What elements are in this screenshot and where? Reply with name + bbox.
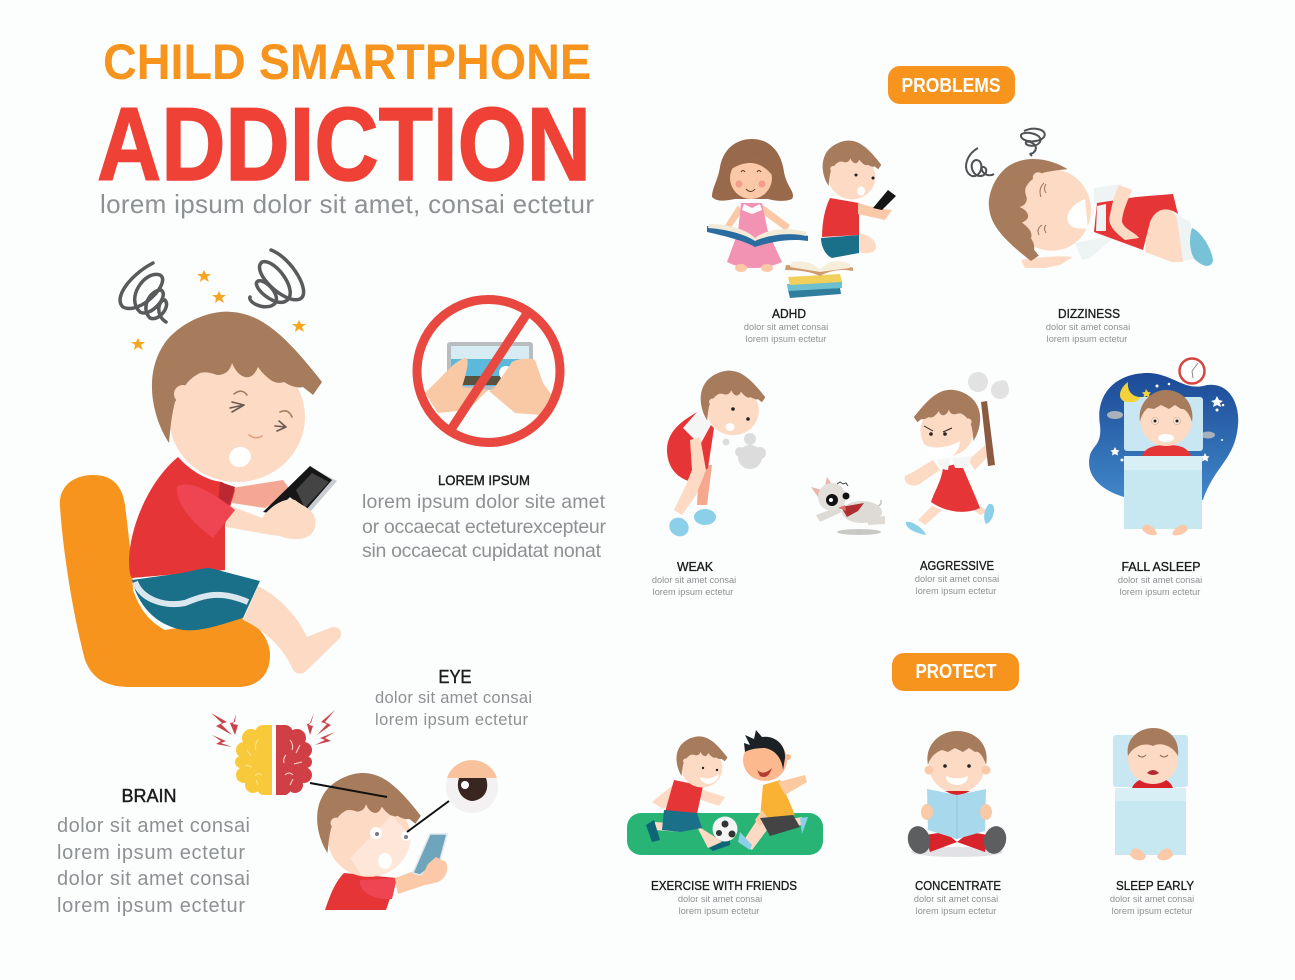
girl feet	[735, 264, 747, 272]
text block: brain	[57, 785, 250, 917]
blanket	[1115, 788, 1186, 855]
pillow	[1124, 397, 1203, 451]
grass	[627, 813, 823, 855]
label: concentrate: lorem ipsum ectetur	[916, 906, 996, 916]
label: concentrate: CONCENTRATE	[915, 878, 1001, 893]
boy looking at glowing phone	[310, 773, 449, 910]
label: fall asleep: dolor sit amet consai	[1118, 575, 1202, 585]
hand	[422, 857, 447, 885]
head	[914, 390, 980, 456]
label: weak: WEAK	[677, 559, 713, 574]
sleeve	[177, 484, 235, 538]
mouth	[226, 444, 254, 470]
phone	[413, 834, 447, 875]
head	[317, 773, 421, 877]
text block: lorem ipsum: or occaecat ecteturexcepteur	[362, 516, 606, 538]
pillow	[1113, 735, 1188, 787]
boy two hair	[744, 730, 785, 770]
label: dizziness: dolor sit amet consai	[1046, 322, 1130, 332]
leg and foot	[243, 586, 341, 674]
shirt	[1132, 777, 1173, 788]
subtitle: lorem ipsum dolor sit amet, consai ectetur	[100, 189, 594, 219]
dog scarf	[841, 503, 864, 517]
dog ears	[811, 477, 834, 500]
shoes	[906, 522, 926, 535]
label: adhd: dolor sit amet consai	[744, 322, 828, 332]
legs	[918, 506, 942, 525]
boy one shirt	[665, 780, 703, 814]
feet	[1142, 525, 1188, 535]
shorts	[132, 568, 260, 630]
label: dizziness: lorem ipsum ectetur	[1047, 334, 1127, 344]
breath puffs	[722, 433, 766, 469]
arm and front leg	[674, 437, 706, 515]
stick	[981, 401, 995, 466]
closed eyes	[1138, 755, 1168, 757]
icon: brain with lightning	[211, 710, 335, 795]
head	[1140, 394, 1192, 446]
badge: problems: PROBLEMS	[902, 75, 1000, 97]
sock	[1170, 210, 1198, 262]
red hemisphere	[276, 725, 312, 795]
closed eyes	[1038, 183, 1046, 235]
label: fall asleep: FALL ASLEEP	[1122, 559, 1200, 574]
label: sleep early	[1110, 878, 1194, 916]
pointer line to brain	[310, 783, 387, 797]
dog body	[842, 501, 882, 523]
label: dizziness: DIZZINESS	[1058, 306, 1120, 321]
text block: lorem ipsum	[362, 472, 606, 562]
phone in landscape	[447, 342, 533, 390]
dress	[931, 463, 980, 512]
label: sleep early: SLEEP EARLY	[1116, 878, 1194, 893]
badge: problems	[888, 66, 1015, 104]
icon: dizzy coil left	[120, 263, 167, 322]
main illustration: boy on chair with smartphone	[60, 250, 341, 687]
boy shirt	[822, 198, 859, 237]
arms	[905, 460, 940, 486]
label: adhd: lorem ipsum ectetur	[746, 334, 826, 344]
label: adhd: ADHD	[772, 306, 806, 321]
text block: lorem ipsum: lorem ipsum dolor site amet	[362, 491, 606, 513]
foot	[1190, 228, 1213, 266]
body	[667, 412, 714, 482]
boy shorts	[821, 235, 859, 258]
label: aggressive: AGGRESSIVE	[920, 558, 994, 573]
head	[929, 737, 985, 793]
shadow	[911, 847, 1003, 857]
label: weak	[652, 559, 736, 597]
shirt	[1142, 445, 1191, 456]
girl face	[730, 157, 772, 199]
hugging arm	[1109, 185, 1139, 240]
eyes	[370, 827, 382, 839]
boy two face	[743, 739, 787, 781]
label: fall asleep: lorem ipsum ectetur	[1120, 587, 1200, 597]
panel: aggressive	[811, 372, 1009, 535]
text block: eye: dolor sit amet consai	[375, 689, 532, 707]
text block: eye: lorem ipsum ectetur	[375, 711, 528, 729]
boy two shorts	[760, 815, 800, 836]
label: exercise with friends: EXERCISE WITH FRIENDS	[651, 878, 797, 893]
head	[989, 159, 1091, 261]
shirt	[1094, 194, 1178, 250]
panel: adhd	[707, 139, 896, 298]
dog shadow	[837, 529, 881, 535]
icon: eye close-up	[446, 760, 498, 813]
blanket	[1124, 456, 1202, 529]
boy two legs	[742, 817, 803, 850]
girl dress	[727, 203, 782, 268]
text block: eye	[375, 666, 532, 729]
legs	[925, 832, 988, 852]
boy knee	[859, 234, 876, 253]
collar	[945, 791, 970, 797]
dog head	[818, 483, 846, 511]
pale gap in shirt	[1096, 204, 1106, 231]
boy two shirt	[760, 780, 795, 818]
dog legs and tail	[816, 507, 885, 525]
boy two arm	[755, 775, 807, 826]
icon: stars	[131, 270, 306, 350]
mouth	[1147, 770, 1159, 775]
night blob	[1089, 373, 1238, 500]
label: aggressive	[915, 558, 999, 596]
label: exercise with friends	[651, 878, 797, 916]
phone	[264, 467, 337, 514]
head	[1128, 734, 1178, 784]
boy one shorts	[662, 810, 702, 832]
title line: child smartphone: CHILD SMARTPHONE	[103, 34, 591, 90]
hands	[425, 358, 488, 413]
badge: protect: PROTECT	[916, 661, 996, 683]
text block: eye: EYE	[438, 666, 472, 687]
panel: exercise with friends	[627, 730, 823, 855]
shirt	[325, 873, 397, 910]
boy head	[823, 141, 881, 199]
text block: lorem ipsum: sin occaecat cupidatat nonat	[362, 540, 602, 562]
night stars	[1110, 383, 1224, 462]
badge: protect	[892, 653, 1019, 691]
near arm and hand	[226, 499, 315, 539]
girl arms	[722, 205, 790, 232]
far arm	[232, 480, 292, 508]
open book	[707, 226, 808, 247]
label: sleep early: dolor sit amet consai	[1110, 894, 1194, 904]
text block: lorem ipsum: LOREM IPSUM	[438, 472, 530, 488]
brain folds	[284, 740, 302, 785]
clouds	[1107, 411, 1215, 438]
panel: sleep early	[1113, 728, 1188, 860]
panel: weak	[666, 371, 766, 540]
book	[927, 789, 986, 839]
head	[152, 312, 322, 482]
stack of books	[788, 288, 841, 298]
boy one legs	[655, 822, 722, 848]
text block: brain: dolor sit amet consai	[57, 868, 250, 890]
label: weak: dolor sit amet consai	[652, 575, 736, 585]
feet	[1130, 848, 1173, 860]
chair	[60, 475, 270, 687]
head	[701, 371, 765, 435]
upper pale sleeve	[1094, 184, 1122, 205]
text block: brain: lorem ipsum ectetur	[57, 895, 245, 917]
under hand	[1021, 256, 1073, 268]
boy one head	[676, 736, 728, 788]
boy phone	[873, 190, 896, 210]
no-phone sign icon	[417, 300, 560, 442]
text block: brain: dolor sit amet consai	[57, 815, 250, 837]
arm	[395, 866, 440, 894]
label: aggressive: dolor sit amet consai	[915, 574, 999, 584]
screen glow	[350, 815, 412, 876]
shirt	[129, 457, 235, 578]
pointer line to eye	[407, 801, 449, 832]
icon: dizzy coil right	[250, 250, 304, 307]
girl hair	[712, 139, 793, 201]
title line: addiction: ADDICTION	[97, 87, 591, 203]
lightning bolts	[211, 710, 335, 747]
soccer ball	[712, 816, 738, 842]
back leg	[697, 465, 712, 505]
coils	[966, 148, 994, 176]
hands	[921, 804, 933, 820]
label: concentrate	[914, 878, 1001, 916]
leg	[1145, 205, 1183, 262]
panel: concentrate	[905, 731, 1009, 857]
label: exercise with friends: dolor sit amet consai	[678, 894, 762, 904]
label: sleep early: lorem ipsum ectetur	[1112, 906, 1192, 916]
label: concentrate: dolor sit amet consai	[914, 894, 998, 904]
prohibition ring	[417, 300, 560, 442]
face details	[230, 391, 292, 438]
label: dizziness	[1046, 306, 1130, 344]
feet	[694, 509, 716, 525]
dust puffs	[968, 372, 1009, 399]
mouth	[1067, 199, 1088, 229]
label: exercise with friends: lorem ipsum ectetur	[679, 906, 759, 916]
panel: dizziness	[966, 129, 1213, 268]
moon	[1120, 382, 1141, 402]
label: weak: lorem ipsum ectetur	[653, 587, 733, 597]
boy arm	[858, 203, 892, 220]
text block: brain: BRAIN	[122, 785, 176, 806]
lower pale sleeve	[1075, 235, 1117, 260]
clock	[1180, 358, 1204, 384]
panel: fall asleep	[1089, 358, 1238, 535]
label: fall asleep	[1118, 559, 1202, 597]
label: adhd	[744, 306, 828, 344]
label: aggressive: lorem ipsum ectetur	[916, 586, 996, 596]
yellow hemisphere	[235, 725, 272, 795]
text block: brain: lorem ipsum ectetur	[57, 842, 245, 864]
boy one arms	[652, 785, 725, 809]
shoes	[905, 824, 933, 856]
